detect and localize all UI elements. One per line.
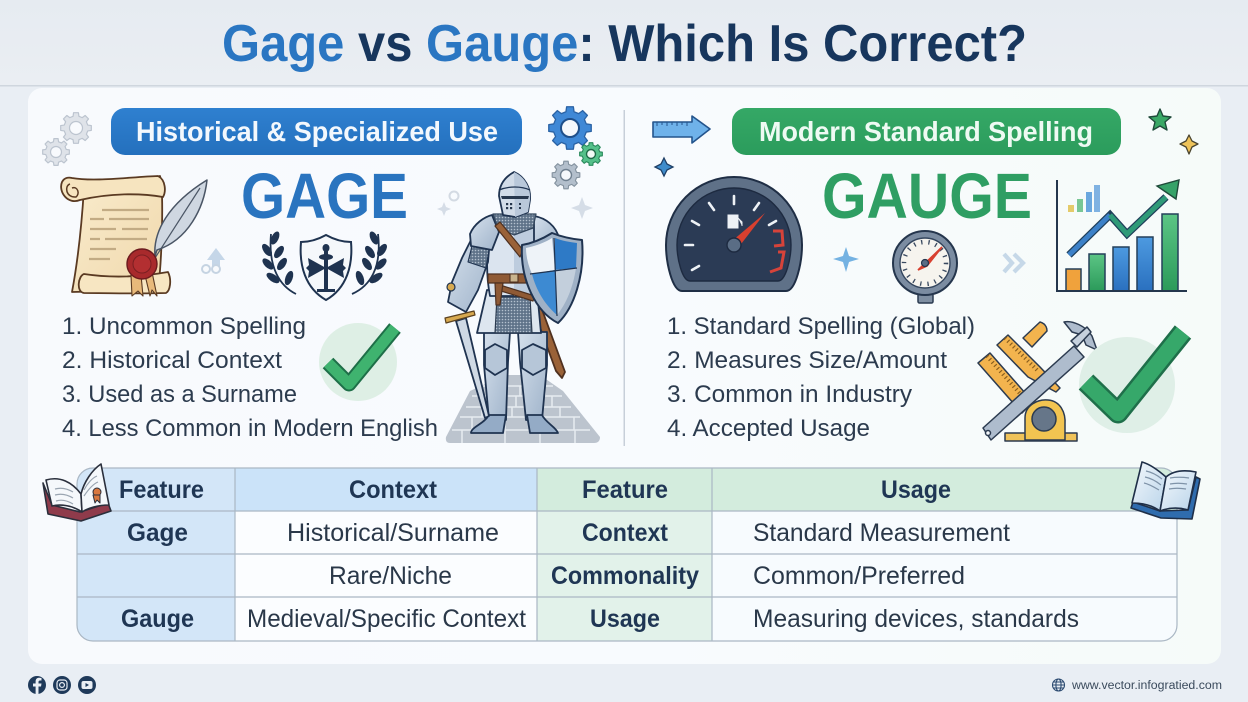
icon: youtube bbox=[78, 676, 96, 694]
icon: rulers, caliper and tape measure bbox=[978, 322, 1097, 441]
list: gage points: 4. Less Common in Modern English bbox=[62, 415, 438, 442]
pill heading: historical and specialized use: Historical & Specialized Use bbox=[136, 116, 498, 147]
icon: gold sparkle bbox=[1180, 135, 1198, 154]
icon: light blue sparkle bbox=[833, 247, 859, 272]
main card bbox=[28, 88, 1221, 664]
list: gage points bbox=[62, 313, 438, 442]
torso bbox=[487, 224, 540, 296]
belt bbox=[488, 274, 535, 301]
panel: gage historical use bbox=[43, 107, 602, 443]
table row 2 bbox=[329, 562, 965, 590]
table row 3: Usage bbox=[590, 605, 660, 633]
table row 1: Historical/Surname bbox=[287, 519, 499, 547]
list: gauge points: 2. Measures Size/Amount bbox=[667, 347, 947, 374]
icon: faint double chevron bbox=[1004, 254, 1023, 272]
table row 1: Standard Measurement bbox=[753, 519, 1010, 547]
table row 3 bbox=[121, 605, 1079, 633]
header band bbox=[0, 0, 1248, 86]
icon: fuel gauge dashboard dial bbox=[666, 177, 802, 291]
divider between panels bbox=[624, 110, 625, 446]
table row 3: Medieval/Specific Context bbox=[247, 605, 526, 633]
mail collar bbox=[493, 214, 536, 235]
chart trend arrow bbox=[1069, 180, 1179, 255]
pill heading: modern standard spelling bbox=[732, 108, 1121, 155]
list: gage points: 2. Historical Context bbox=[62, 347, 282, 374]
table row 3: Gauge bbox=[121, 605, 194, 633]
sword blade bbox=[456, 318, 489, 418]
table row 3: Measuring devices, standards bbox=[753, 605, 1079, 633]
table row 1: Gage bbox=[127, 519, 188, 547]
chart main bars bbox=[1066, 214, 1178, 291]
icon: green star bbox=[1149, 109, 1171, 130]
social icons bbox=[28, 676, 96, 694]
list: gage points: 1. Uncommon Spelling bbox=[62, 313, 306, 340]
pill heading: modern standard spelling: Modern Standard Spelling bbox=[759, 116, 1093, 147]
arm and gauntlet bbox=[448, 238, 490, 312]
icon: ruler arrow bbox=[653, 116, 710, 143]
icon: laurels and heraldic shield bbox=[260, 230, 389, 300]
word: GAGE: GAGE bbox=[241, 160, 408, 232]
table header row: Feature bbox=[582, 476, 668, 504]
word: GAUGE: GAUGE bbox=[822, 160, 1032, 232]
icon: large green check bbox=[1079, 332, 1183, 433]
icon: small blue sparkle bbox=[655, 158, 673, 176]
helmet bbox=[499, 172, 530, 217]
list: gauge points: 1. Standard Spelling (Global) bbox=[667, 313, 975, 340]
icon: globe bbox=[1052, 679, 1064, 691]
table row 1: Context bbox=[582, 519, 669, 547]
icon: green check bbox=[319, 323, 397, 401]
sabatons bbox=[471, 415, 506, 433]
paved ground bbox=[446, 375, 600, 443]
table row 1 bbox=[127, 519, 1010, 547]
icon: faint arrow with rings bbox=[202, 248, 225, 273]
footer website: www.vector.infogratied.com bbox=[1071, 680, 1222, 692]
table row 2: Rare/Niche bbox=[329, 562, 452, 590]
legs bbox=[484, 332, 510, 420]
heater shield bbox=[522, 233, 582, 323]
table header row: Feature bbox=[119, 476, 204, 504]
list: gauge points bbox=[667, 313, 975, 442]
pill heading: historical and specialized use bbox=[111, 108, 522, 155]
icon: decorative ring and sparkles bbox=[437, 192, 593, 219]
icon: parchment scroll with quill and wax seal bbox=[61, 176, 207, 296]
icon: red open book bbox=[43, 464, 111, 521]
bar chart with rising arrow bbox=[1057, 180, 1187, 291]
chart small legend bars bbox=[1068, 185, 1100, 212]
table row 2: Commonality bbox=[551, 562, 699, 590]
pauldrons bbox=[470, 215, 499, 250]
title: Gage vs Gauge: Which Is Correct? bbox=[222, 15, 1027, 73]
chart axes bbox=[1057, 180, 1187, 291]
panel: gauge modern spelling bbox=[653, 108, 1198, 442]
table header row: Context bbox=[349, 476, 438, 504]
icon: pressure gauge bbox=[893, 231, 957, 303]
icon: instagram bbox=[53, 676, 71, 694]
list: gauge points: 3. Common in Industry bbox=[667, 381, 912, 408]
illustration: armored knight with sword and shield bbox=[445, 172, 600, 443]
tunic and mail skirt bbox=[477, 290, 541, 333]
table header row bbox=[119, 476, 951, 504]
list: gage points: 3. Used as a Surname bbox=[62, 381, 297, 408]
icon: grey gears bbox=[43, 113, 91, 165]
list: gauge points: 4. Accepted Usage bbox=[667, 415, 870, 442]
sword hilt bbox=[445, 283, 475, 323]
diagonal strap bbox=[495, 222, 523, 257]
icon: facebook bbox=[28, 676, 46, 694]
comparison table bbox=[77, 468, 1177, 641]
icon: blue and green gears bbox=[549, 107, 602, 189]
icon: blue open book bbox=[1131, 462, 1200, 519]
scabbard bbox=[530, 296, 565, 378]
table header row: Usage bbox=[881, 476, 951, 504]
table row 2: Common/Preferred bbox=[753, 562, 965, 590]
